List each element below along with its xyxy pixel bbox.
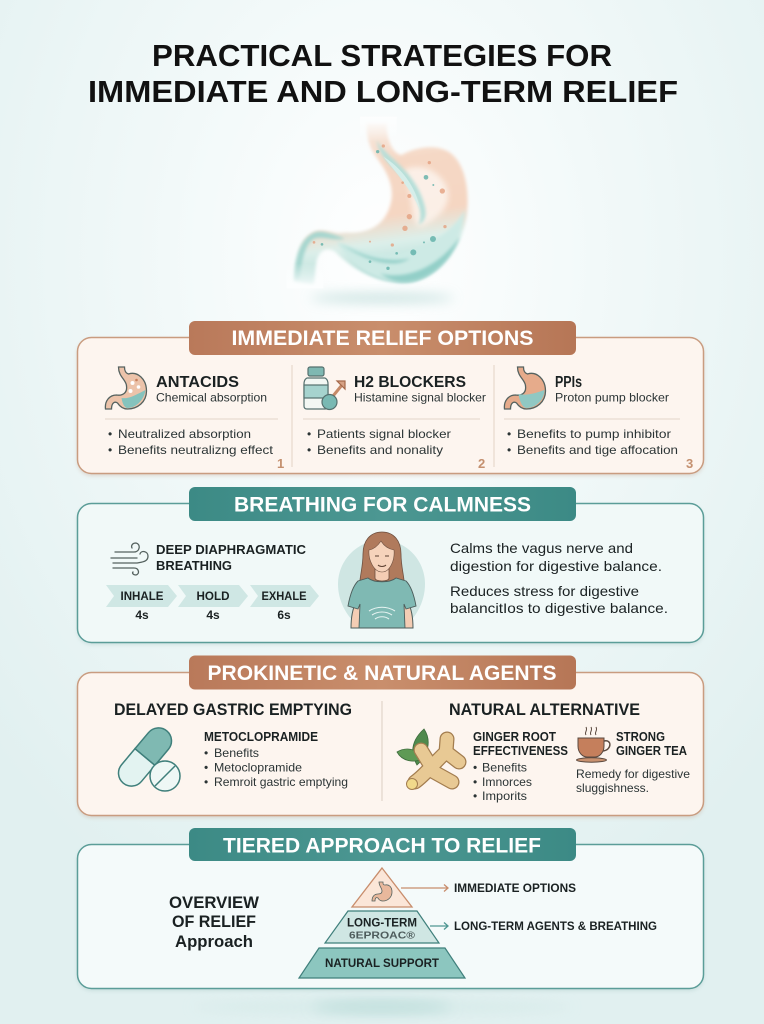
panel: breathing for calmness [78, 487, 704, 644]
breathing steps [106, 585, 319, 622]
text: metoclopramide: Remroit gastric emptying [214, 775, 348, 789]
column: ppis: Benefits and tige affocation [517, 443, 678, 457]
column: antacids: Chemical absorption [156, 390, 267, 404]
breathing steps: 4s [135, 608, 149, 622]
arrow: to long-term agents [430, 922, 448, 930]
column: antacids [105, 367, 284, 471]
breathing steps: INHALE [120, 591, 164, 603]
subheading: delayed gastric emptying: DELAYED GASTRIC EMPTYING [114, 701, 352, 719]
column: h2 blockers: • [307, 427, 311, 441]
breathing steps: HOLD [196, 591, 230, 603]
heading: tiered approach to relief [189, 828, 576, 861]
breathing steps: EXHALE [262, 591, 307, 603]
breathing steps: 6s [277, 608, 291, 622]
column: ppis: PPIs [555, 374, 582, 391]
text: ginger root effectiveness: Benefits [482, 760, 527, 774]
panel: immediate relief options [78, 321, 704, 476]
column: h2 blockers: H2 BLOCKERS [354, 374, 466, 391]
text: deep diaphragmatic breathing: BREATHING [156, 559, 232, 573]
text: metoclopramide: • [204, 746, 208, 760]
text: deep diaphragmatic breathing: DEEP DIAPHRAGMATIC [156, 543, 306, 557]
icon: tea cup [576, 727, 610, 762]
text: benefits of breathing: Reduces stress for digestive [450, 583, 639, 599]
column: antacids: Benefits neutralizng effect [118, 443, 274, 457]
text: benefits of breathing [450, 540, 668, 616]
subheading: natural alternative: NATURAL ALTERNATIVE [449, 701, 640, 719]
text: benefits of breathing: digestion for digestive balance. [450, 558, 662, 574]
text: ginger root effectiveness: EFFECTIVENESS [473, 744, 568, 758]
column: ppis: • [507, 443, 511, 457]
icon: stomach with acid [504, 367, 546, 409]
breathing steps: 4s [206, 608, 220, 622]
text: overview of relief approach: Approach [175, 933, 253, 951]
text: overview of relief approach [169, 894, 259, 951]
column: ppis: 3 [686, 456, 693, 471]
column: ppis: • [507, 427, 511, 441]
text: metoclopramide: Benefits [214, 746, 259, 760]
icon: ginger root [397, 729, 459, 790]
column: ppis: Benefits to pump inhibitor [517, 427, 671, 441]
text: ginger root effectiveness: Imporits [482, 789, 527, 803]
column: h2 blockers: 2 [478, 456, 485, 471]
text: overview of relief approach: OVERVIEW [169, 894, 259, 912]
label: long-term agents and breathing: LONG-TERM AGENTS & BREATHING [454, 919, 657, 933]
pyramid chart [299, 868, 465, 978]
icon: medicine bottle [304, 367, 345, 410]
title: PRACTICAL STRATEGIES FOR [152, 38, 612, 73]
label: immediate options: IMMEDIATE OPTIONS [454, 881, 576, 895]
icon: wind [111, 543, 148, 575]
icon: stomach illustration [287, 117, 468, 303]
arrow: to immediate options [401, 884, 448, 892]
text: metoclopramide: • [204, 760, 208, 774]
text: strong ginger tea: sluggishness. [576, 781, 649, 795]
text: overview of relief approach: OF RELIEF [172, 913, 256, 931]
heading: immediate relief options: IMMEDIATE RELIEF OPTIONS [232, 327, 534, 350]
text: metoclopramide: • [204, 775, 208, 789]
text: benefits of breathing: balancitIos to digestive balance. [450, 600, 668, 616]
text: ginger root effectiveness: • [473, 789, 477, 803]
heading: immediate relief options [189, 321, 576, 355]
text: metoclopramide: Metoclopramide [214, 760, 302, 774]
heading: breathing for calmness [189, 487, 576, 521]
tier: immediate [352, 868, 412, 907]
text: strong ginger tea [576, 730, 690, 795]
text: ginger root effectiveness [473, 730, 568, 803]
heading: tiered approach to relief: TIERED APPROACH TO RELIEF [223, 834, 541, 858]
column: antacids: 1 [277, 456, 284, 471]
heading: breathing for calmness: BREATHING FOR CALMNESS [234, 494, 531, 516]
column: h2 blockers [303, 367, 486, 471]
heading: prokinetic and natural agents: PROKINETIC & NATURAL AGENTS [208, 662, 556, 685]
heading: prokinetic and natural agents [189, 656, 576, 690]
text: benefits of breathing: Calms the vagus nerve and [450, 540, 633, 556]
icon: capsule and tablet [113, 723, 180, 791]
tier: long-term [325, 911, 439, 943]
text: strong ginger tea: GINGER TEA [616, 744, 687, 758]
column: antacids: Neutralized absorption [118, 427, 251, 441]
panel: prokinetic and natural agents [78, 656, 704, 818]
text: metoclopramide: METOCLOPRAMIDE [204, 730, 318, 744]
tier: natural support: NATURAL SUPPORT [325, 958, 439, 970]
column: h2 blockers: Histamine signal blocker [354, 390, 486, 404]
text: strong ginger tea: Remedy for digestive [576, 767, 690, 781]
text: strong ginger tea: STRONG [616, 730, 665, 744]
column: h2 blockers: • [307, 443, 311, 457]
column: antacids: • [108, 427, 112, 441]
column: ppis: Proton pump blocker [555, 390, 669, 404]
icon: person breathing [338, 532, 425, 628]
text: deep diaphragmatic breathing [156, 543, 306, 573]
tier: long-term: LONG-TERM [347, 918, 417, 930]
column: ppis [504, 367, 693, 471]
text: ginger root effectiveness: • [473, 775, 477, 789]
title: IMMEDIATE AND LONG-TERM RELIEF [88, 74, 678, 109]
text: metoclopramide [204, 730, 348, 789]
text: ginger root effectiveness: GINGER ROOT [473, 730, 556, 744]
column: antacids: • [108, 443, 112, 457]
title [88, 38, 678, 109]
column: antacids: ANTACIDS [156, 374, 239, 391]
text: ginger root effectiveness: • [473, 760, 477, 774]
tier: long-term: 6EPROAC® [349, 930, 415, 942]
icon: stomach with antacid [105, 367, 146, 409]
tier: natural support [299, 948, 465, 978]
text: ginger root effectiveness: Imnorces [482, 775, 532, 789]
column: h2 blockers: Patients signal blocker [317, 427, 451, 441]
column: h2 blockers: Benefits and nonality [317, 443, 443, 457]
panel: tiered approach to relief [78, 828, 704, 990]
